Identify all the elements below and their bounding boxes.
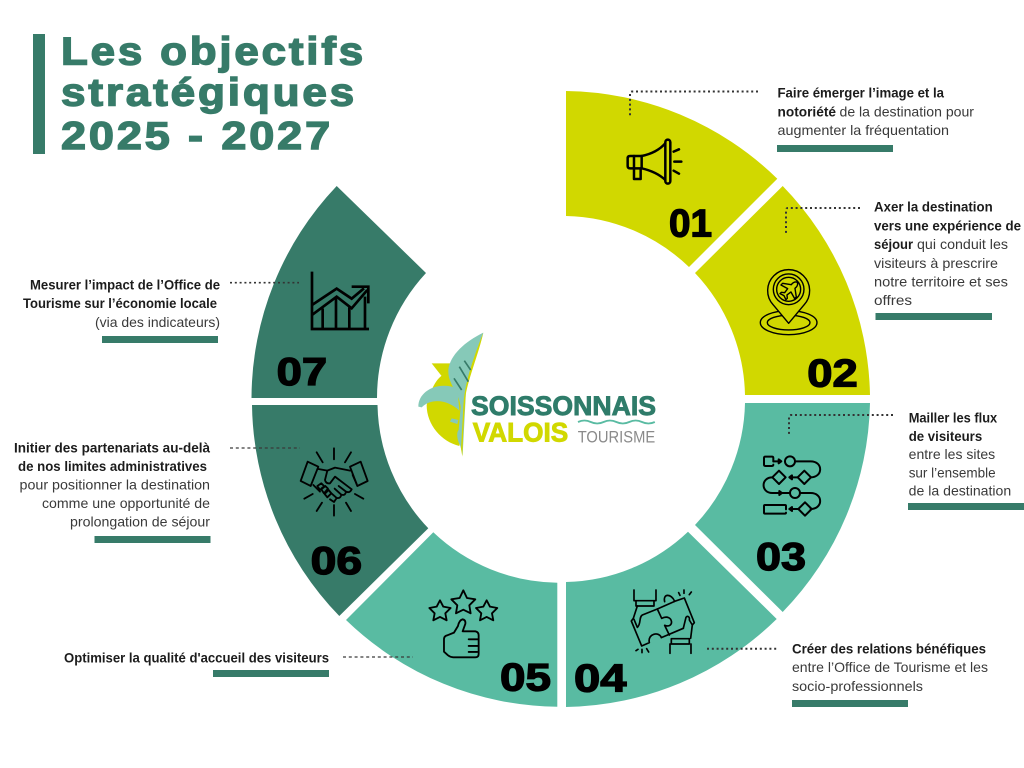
text block 02: séjour: [874, 237, 914, 252]
text block 03: Mailler les flux: [909, 411, 998, 426]
logo wordmark: SOISSONNAIS: [471, 391, 656, 421]
text block 01: [777, 85, 974, 152]
panel: segment 02: [695, 186, 870, 396]
title: Les objectifs: [61, 30, 366, 73]
text block 01: de la destination pour: [840, 104, 974, 120]
text block 06: de nos limites administratives: [18, 459, 207, 474]
connector 02: [786, 208, 860, 233]
connector 05: [343, 656, 413, 658]
text block 07: [23, 278, 220, 343]
text block 05: Optimiser la qualité d'accueil des visiteurs: [64, 651, 329, 666]
text block 01: notoriété: [778, 104, 836, 120]
panel: segment 07: [252, 186, 426, 398]
title: stratégiques: [61, 72, 357, 114]
panel: segment 06: [252, 405, 428, 616]
panel: segment 04: [566, 532, 777, 707]
text block 03: de visiteurs: [909, 429, 982, 444]
number 02: 02: [807, 353, 858, 396]
text block 06: [14, 441, 210, 543]
connector 06: [230, 447, 300, 449]
number 04: 04: [574, 658, 627, 701]
icon: stars and thumb up: [429, 590, 497, 657]
icon: growth chart: [312, 272, 369, 329]
logo: [418, 333, 656, 457]
icon: process flow: [764, 456, 820, 516]
text block 07: Tourisme sur l’économie locale: [23, 296, 217, 311]
text block 04: socio-professionnels: [792, 679, 923, 694]
text block 04: [792, 642, 988, 707]
text block 06: pour positionner la destination: [20, 477, 210, 492]
text block 06: prolongation de séjour: [70, 514, 210, 530]
text block 07: (via des indicateurs): [95, 315, 220, 330]
text block 04: entre l’Office de Tourisme et les: [792, 660, 988, 675]
number 07: 07: [277, 351, 327, 394]
panel: segment 05: [346, 532, 557, 707]
logo: TOURISME: [578, 428, 655, 446]
number 05: 05: [500, 657, 551, 700]
logo emblem: [418, 333, 483, 457]
connector 04: [707, 648, 778, 650]
title: 2025 - 2027: [61, 115, 333, 158]
text block 07: Mesurer l’impact de l’Office de: [30, 278, 220, 292]
logo: VALOIS: [473, 418, 568, 448]
text block 05: [64, 651, 329, 677]
text block 03: entre les sites: [909, 447, 995, 462]
title: [33, 30, 366, 158]
text block 01: augmenter la fréquentation: [778, 123, 949, 138]
connector 03: [789, 415, 893, 436]
text block 03: sur l’ensemble: [909, 466, 996, 480]
text block 03: [908, 411, 1024, 510]
connector 07: [230, 282, 299, 284]
icon: megaphone: [628, 140, 681, 184]
text block 02: qui conduit les: [917, 237, 1008, 252]
icon: handshake: [301, 448, 368, 516]
text block 01: Faire émerger l’image et la: [778, 85, 944, 100]
text block 02: offres: [874, 293, 912, 308]
text block 06: comme une opportunité de: [42, 496, 210, 511]
panel: segment 03: [695, 403, 870, 612]
text block 02: visiteurs à prescrire: [874, 256, 998, 271]
text block 02: Axer la destination: [874, 200, 993, 215]
number 06: 06: [311, 540, 362, 583]
text block 06: Initier des partenariats au-delà: [14, 441, 210, 456]
text block 03: de la destination: [909, 484, 1011, 498]
text block 02: notre territoire et ses: [874, 274, 1008, 290]
text block 02: [874, 200, 1021, 320]
number 01: 01: [669, 203, 712, 246]
text block 04: Créer des relations bénéfiques: [792, 642, 986, 656]
connector 01: [630, 92, 758, 117]
panel: segment 01: [566, 91, 777, 267]
number 03: 03: [756, 536, 806, 579]
icon: map pin with plane: [760, 270, 817, 335]
text block 02: vers une expérience de: [874, 219, 1021, 234]
icon: hands with puzzle: [631, 590, 694, 653]
